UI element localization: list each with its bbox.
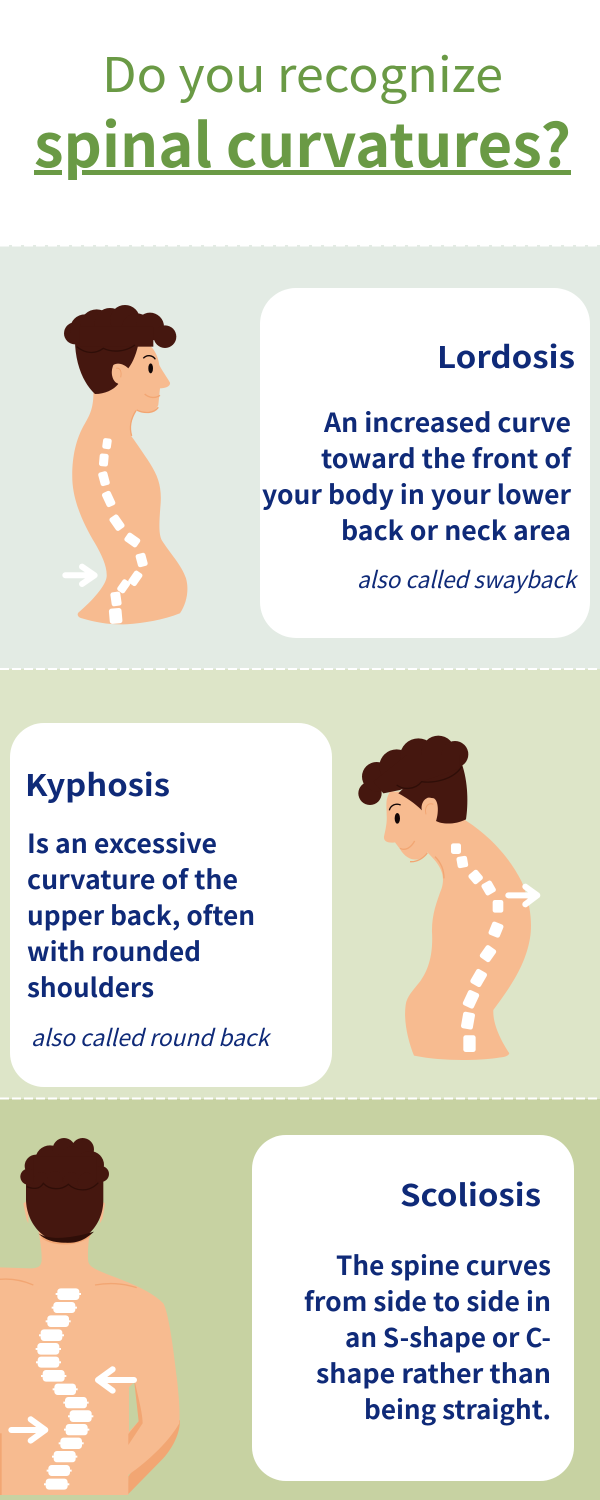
- note: also called swayback: also called swayback: [357, 561, 579, 595]
- heading: Lordosis: Lordosis: [437, 333, 575, 377]
- text: lordosis description: your body in your lower: [262, 475, 572, 512]
- text: lordosis description: back or neck area: [341, 511, 571, 548]
- icon: arrow upper: [98, 1369, 134, 1391]
- illustration: scoliosis figure: [0, 1138, 180, 1495]
- text: scoliosis description: being straight.: [364, 1390, 551, 1427]
- card: lordosis: [260, 288, 590, 638]
- title: [34, 36, 571, 185]
- text: scoliosis description: an S-shape or C-: [345, 1318, 551, 1355]
- card: scoliosis: [252, 1135, 574, 1481]
- icon: arrow kyphosis: [508, 887, 537, 904]
- heading: Scoliosis: Scoliosis: [400, 1171, 541, 1215]
- text: scoliosis description: [304, 1246, 551, 1427]
- text: kyphosis description: upper back, often: [27, 896, 255, 933]
- text: kyphosis description: shoulders: [27, 968, 154, 1005]
- icon: arrow lower: [11, 1419, 45, 1441]
- text: kyphosis description: with rounded: [27, 932, 201, 969]
- panel: lordosis: [0, 245, 600, 669]
- title: spinal curvatures?: [34, 98, 571, 185]
- panel: kyphosis: [0, 669, 600, 1099]
- icon: arrow lordosis: [65, 567, 95, 584]
- text: lordosis description: An increased curve: [323, 403, 571, 440]
- card: kyphosis: [10, 723, 332, 1087]
- title: Do you recognize: [102, 36, 503, 106]
- text: kyphosis description: [27, 824, 255, 1005]
- text: lordosis description: [262, 403, 572, 548]
- illustration: kyphosis figure: [358, 736, 537, 1060]
- illustration: lordosis figure: [64, 305, 187, 624]
- heading: Kyphosis: Kyphosis: [25, 761, 170, 805]
- text: scoliosis description: shape rather than: [316, 1354, 551, 1391]
- text: kyphosis description: Is an excessive: [27, 824, 217, 861]
- text: kyphosis description: curvature of the: [27, 860, 238, 897]
- panel: scoliosis: [0, 1098, 600, 1500]
- text: scoliosis description: The spine curves: [336, 1246, 551, 1283]
- text: scoliosis description: from side to side in: [304, 1282, 551, 1319]
- text: lordosis description: toward the front of: [321, 439, 572, 476]
- note: also called round back: also called round back: [31, 1019, 272, 1053]
